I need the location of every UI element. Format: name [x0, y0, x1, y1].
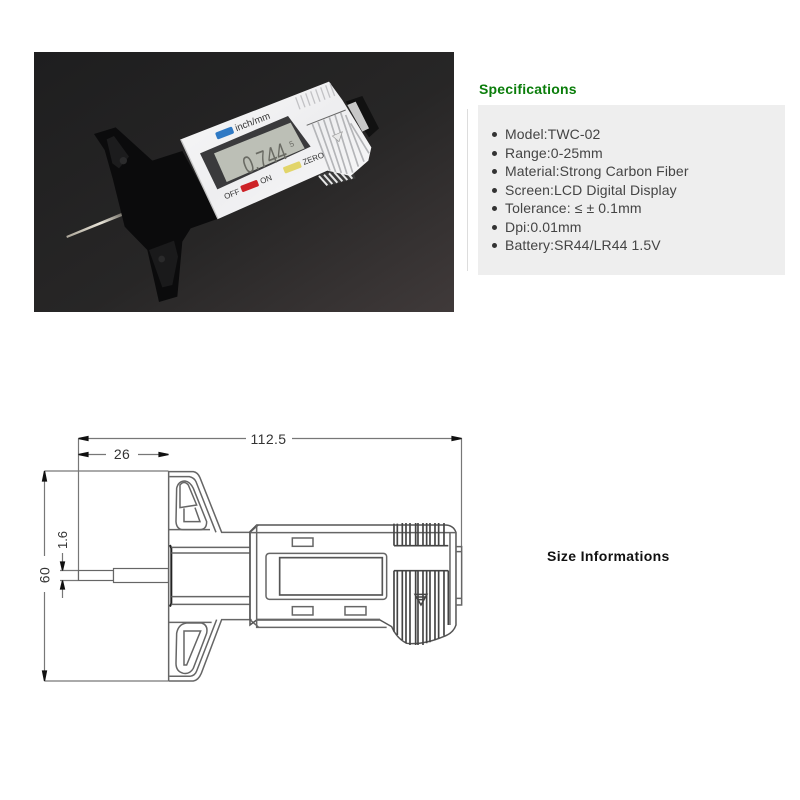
probe pin [66, 213, 123, 238]
dimension: 60 height: 60 [36, 567, 52, 583]
red power button [223, 173, 273, 201]
LCD bezel and screen: 5 [288, 139, 296, 149]
product photo [34, 52, 454, 312]
dimension: 60 height [36, 471, 168, 681]
LCD bezel and screen: 0.744 [239, 138, 291, 180]
spec items [492, 126, 689, 253]
spec items: Material:Strong Carbon Fiber [505, 163, 689, 179]
dimension: 26 probe length [78, 446, 168, 462]
spec items: Dpi:0.01mm [505, 218, 582, 234]
lower grip ribs [312, 113, 369, 174]
dimension: 1.6 probe diameter: 1.6 [55, 531, 70, 549]
silver body [181, 82, 371, 219]
spec items: Range:0-25mm [505, 144, 603, 160]
end cap [346, 96, 379, 137]
red power button: OFF [223, 187, 241, 201]
panel: specifications list [478, 105, 785, 275]
label: size informations: Size Informations [547, 548, 670, 564]
dimension: 26 probe length: 26 [114, 446, 130, 462]
dimension: 112.5 overall length [78, 431, 462, 581]
spec items: Battery:SR44/LR44 1.5V [505, 237, 661, 253]
spec items: Tolerance: ≤ ± 0.1mm [505, 200, 642, 216]
gauge body with display [250, 523, 462, 645]
side rule [467, 109, 468, 271]
probe [78, 568, 168, 582]
dimension: 1.6 probe diameter [55, 531, 78, 598]
thumb wheel [317, 165, 356, 186]
blue inch/mm button [215, 111, 272, 140]
heading: specifications: Specifications [479, 81, 577, 97]
upper grip ribs [296, 83, 335, 109]
yellow zero button [283, 150, 325, 174]
spec items: Model:TWC-02 [505, 126, 600, 142]
black handle [94, 127, 219, 302]
yellow zero button: ZERO [301, 150, 325, 167]
lower grip ribs [394, 571, 448, 645]
spec items: Screen:LCD Digital Display [505, 182, 677, 198]
LCD bezel and screen [200, 116, 311, 189]
upper grip ribs [394, 523, 448, 546]
gauge base with wings [169, 471, 258, 681]
dimension: 112.5 overall length: 112.5 [250, 431, 286, 447]
blue inch/mm button: inch/mm [234, 111, 272, 134]
red power button: ON [259, 173, 273, 186]
